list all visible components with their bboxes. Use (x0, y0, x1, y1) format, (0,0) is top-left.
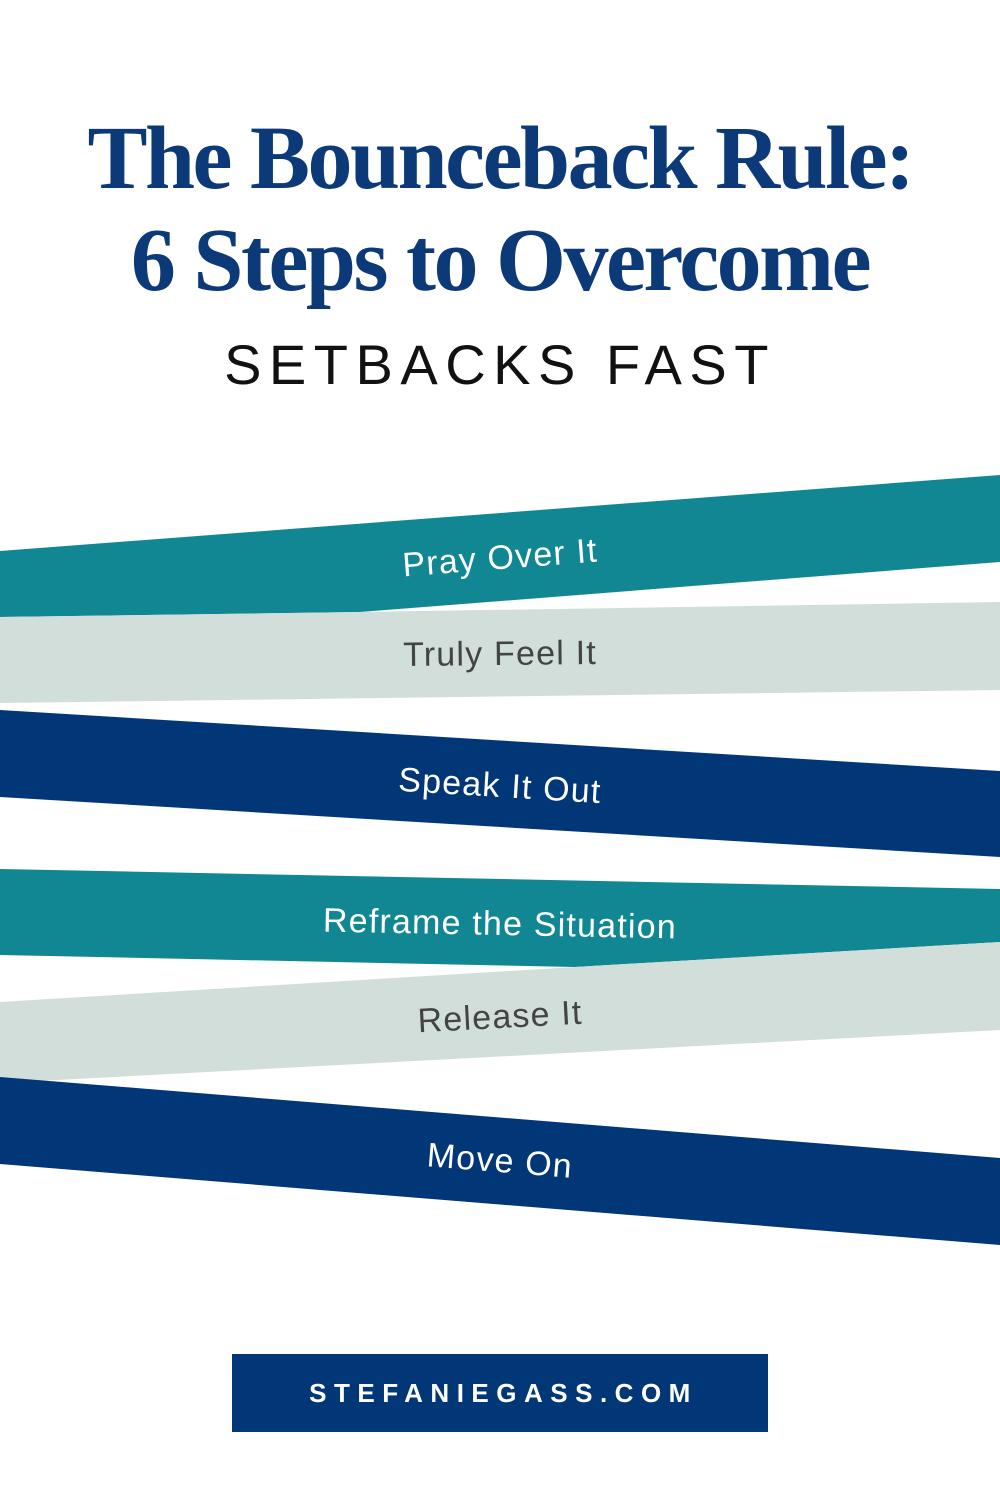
step 1 band (0, 475, 1000, 617)
website button: STEFANIEGASS.COM (309, 1378, 698, 1408)
step 2 band: Truly Feel It (403, 634, 597, 674)
title line 1: The Bounceback Rule: (87, 109, 913, 208)
step 6 band (0, 1077, 1000, 1245)
step 4 band (0, 869, 1000, 967)
website button (232, 1354, 768, 1432)
step 5 band: Release It (417, 994, 583, 1040)
step 1 band: Pray Over It (401, 532, 599, 584)
step 3 band: Speak It Out (397, 761, 603, 811)
step 3 band (0, 710, 1000, 857)
title line 2: 6 Steps to Overcome (131, 211, 869, 310)
step 2 band (0, 602, 1000, 703)
step 6 band: Move On (425, 1136, 574, 1186)
subtitle: SETBACKS FAST (224, 333, 776, 396)
step 4 band: Reframe the Situation (323, 902, 677, 946)
step 5 band (0, 942, 1000, 1083)
